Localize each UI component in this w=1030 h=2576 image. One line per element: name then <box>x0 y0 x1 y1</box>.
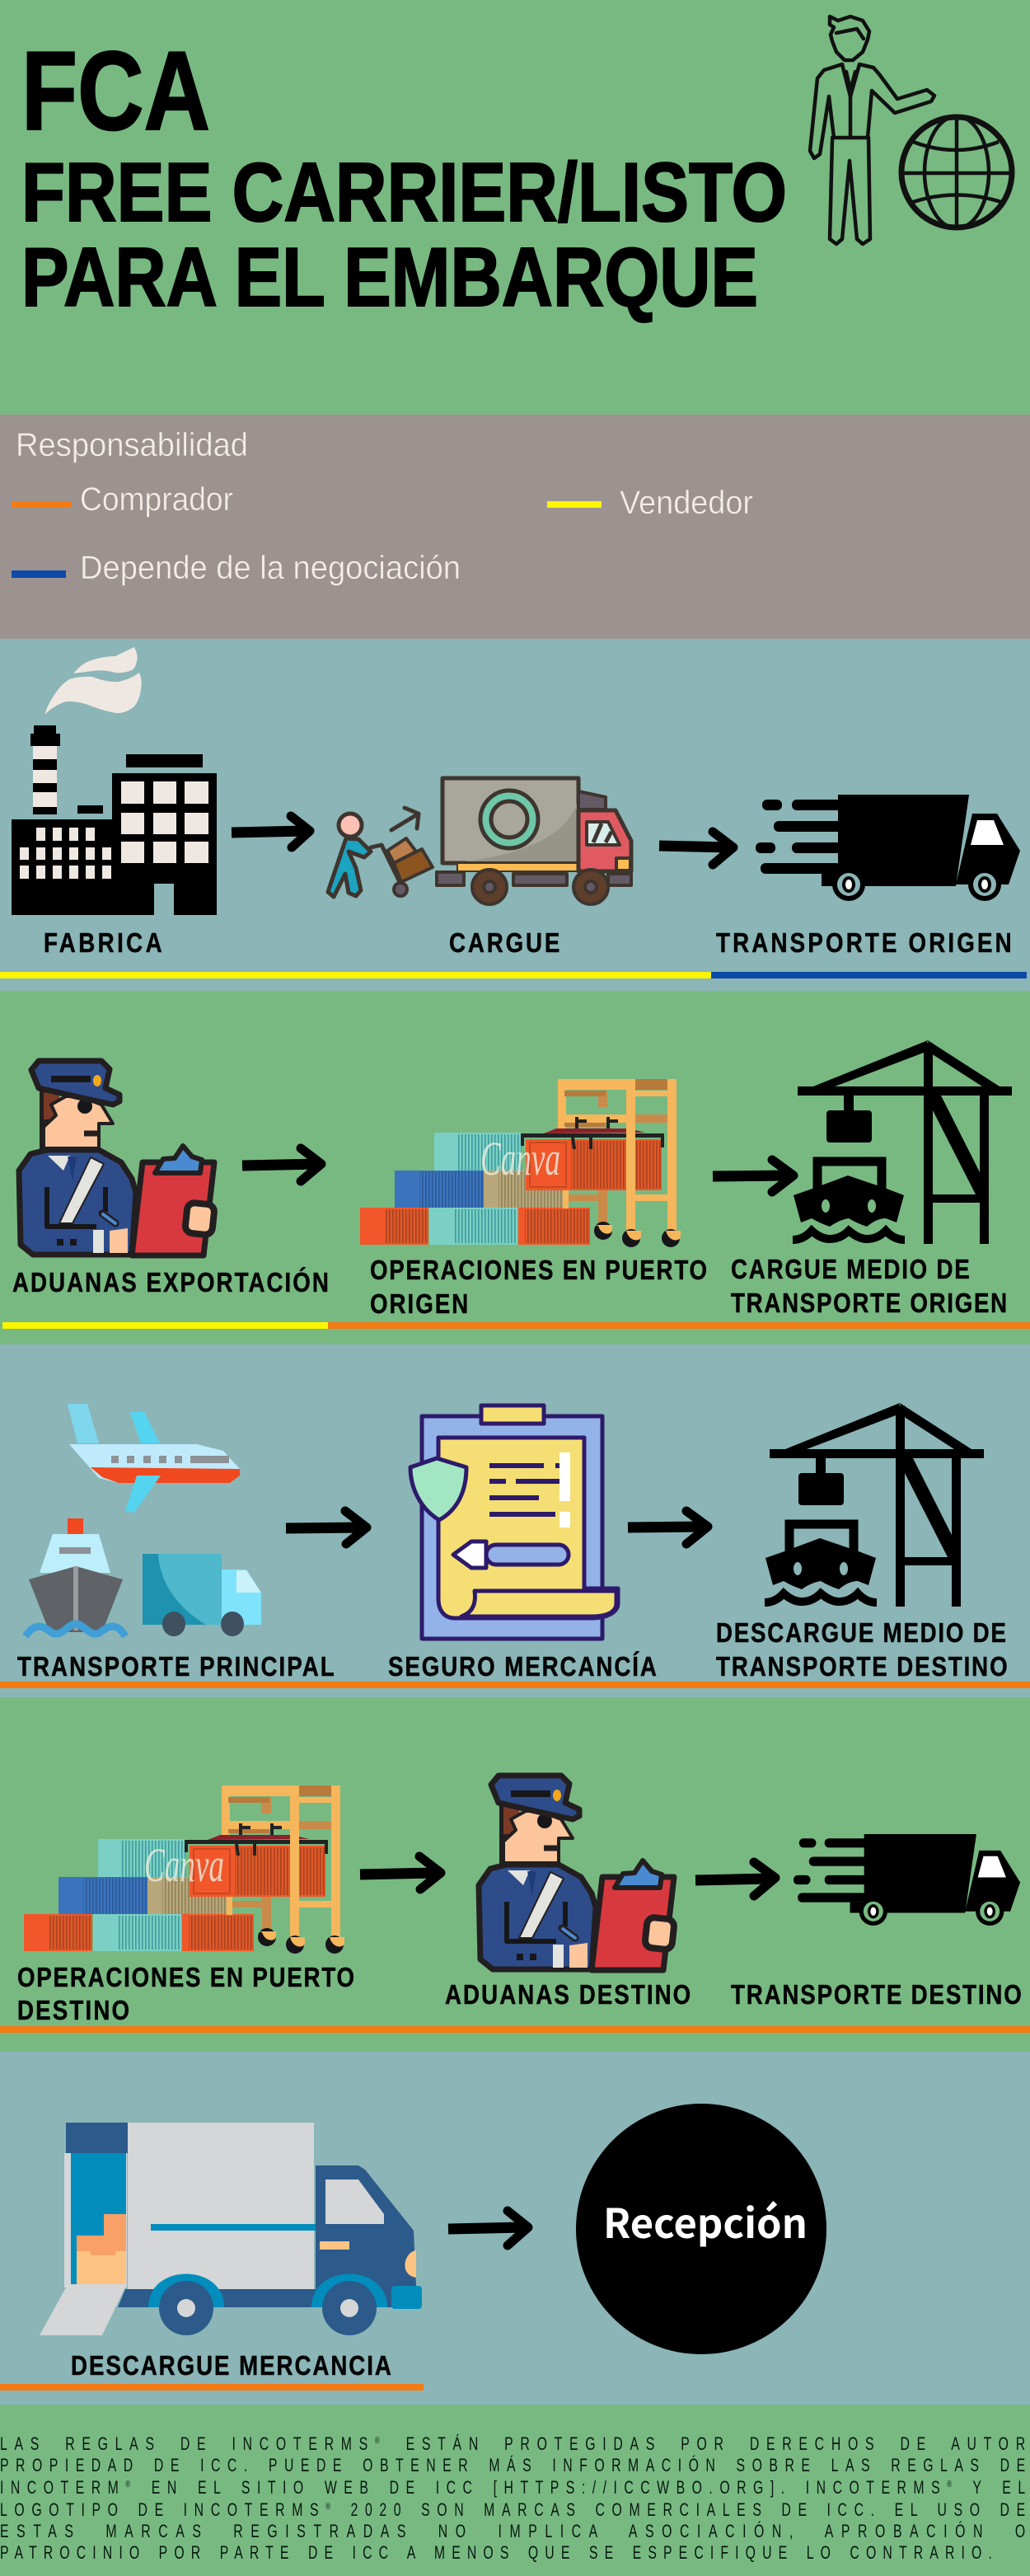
responsibility bar: buyer <box>0 2384 424 2391</box>
label: cargue medio de transporte origen <box>731 1255 1007 1319</box>
legal text block: INCOTERM <box>0 2479 119 2499</box>
panel: step row 4 <box>0 1697 1030 2052</box>
panel: delivery <box>0 2052 1030 2405</box>
label: seguro mercancia: SEGURO MERCANCÍA <box>388 1651 657 1682</box>
label: transporte origen: TRANSPORTE ORIGEN <box>716 928 1012 959</box>
icon: factory <box>12 647 217 915</box>
legal text block: ESTÁN PROTEGIDAS POR DERECHOS DE AUTOR <box>386 2435 1025 2455</box>
label: operaciones en puerto origen: ORIGEN <box>370 1289 468 1320</box>
arrow <box>360 1856 441 1889</box>
legend item: vendedor <box>547 485 753 521</box>
legal text block: ® <box>947 2480 952 2489</box>
arrow <box>713 1160 794 1192</box>
label: descargue medio de transporte destino: DESCARGUE MEDIO DE <box>716 1618 1006 1649</box>
reception circle <box>576 2104 826 2354</box>
arrow <box>232 816 310 847</box>
icon: port crane and ship <box>793 1040 1012 1244</box>
icon: ship <box>26 1518 125 1636</box>
panel: header <box>0 0 1030 415</box>
icon: speeding truck <box>794 1834 1020 1926</box>
label: cargue medio de transporte origen: TRANSPORTE ORIGEN <box>731 1288 1007 1319</box>
legal text block: ESTAS MARCAS REGISTRADAS NO IMPLICA ASOCIACIÓN, APROBACIÓN O <box>0 2521 1025 2542</box>
label: fabrica: FABRICA <box>44 928 162 959</box>
label: cargue medio de transporte origen: CARGUE MEDIO DE <box>731 1255 970 1285</box>
responsibility bar: seller then negotiable <box>0 972 1027 978</box>
legal text block: PROPIEDAD DE ICC. PUEDE OBTENER MÁS INFORMACIÓN SOBRE LAS REGLAS DE <box>0 2455 1025 2476</box>
label: descargue medio de transporte destino <box>716 1618 1008 1682</box>
responsibility bar: buyer <box>0 2026 1030 2033</box>
watermark: Canva <box>480 1132 560 1185</box>
label: cargue: CARGUE <box>449 928 559 959</box>
label: aduanas exportacion: ADUANAS EXPORTACIÓN <box>12 1266 329 1298</box>
responsibility bar: seller then buyer <box>2 1322 1030 1329</box>
legend title: Responsabilidad <box>16 427 248 463</box>
icon: speeding truck <box>756 795 1020 901</box>
label: descargue mercancia: DESCARGUE MERCANCIA <box>71 2351 391 2381</box>
title: FCA: FCA <box>21 28 210 153</box>
legal text block: ® <box>325 2502 330 2512</box>
arrow <box>659 832 733 865</box>
legal text block: PATROCINIO POR PARTE DE ICC A MENOS QUE SE ESPECIFIQUE LO CONTRARIO. <box>0 2544 992 2564</box>
icon: globe <box>901 116 1012 229</box>
legal text block: Y EL <box>958 2479 1025 2499</box>
responsibility bar: buyer <box>0 1682 1030 1688</box>
legend item: comprador <box>12 481 233 518</box>
label: operaciones en puerto destino: OPERACIONES EN PUERTO <box>17 1963 354 1993</box>
legal text block <box>0 2435 1025 2564</box>
icon: unloading truck <box>40 2123 422 2335</box>
legal text block: LAS REGLAS DE INCOTERMS <box>0 2435 368 2455</box>
legend item: vendedor: Vendedor <box>620 485 753 521</box>
icon: businessman <box>810 16 934 244</box>
arrow <box>695 1862 775 1896</box>
arrow <box>286 1511 367 1544</box>
title: free carrier line one: FREE CARRIER/LISTO <box>21 147 787 239</box>
icon: airplane <box>68 1404 240 1513</box>
label: transporte principal: TRANSPORTE PRINCIPAL <box>17 1652 335 1682</box>
arrow <box>628 1511 708 1544</box>
label: operaciones en puerto destino <box>17 1963 354 2026</box>
icon: cargo truck <box>437 778 631 904</box>
icon: insurance document <box>410 1405 618 1639</box>
legend item: depende de la negociacion: Depende de la negociación <box>80 550 461 586</box>
icon: customs officer <box>479 1776 675 1970</box>
panel: step row 1 <box>0 639 1030 991</box>
watermark: Canva <box>144 1838 224 1892</box>
label: transporte destino: TRANSPORTE DESTINO <box>731 1980 1022 2011</box>
icon: containers and crane <box>360 1079 681 1247</box>
icon: worker with dolly <box>328 808 433 897</box>
label: aduanas destino: ADUANAS DESTINO <box>445 1980 691 2011</box>
legal text block: LOGOTIPO DE INCOTERMS <box>0 2501 319 2521</box>
icon: delivery truck teal <box>143 1554 261 1636</box>
arrow <box>242 1148 321 1181</box>
panel: legal footer <box>0 2405 1030 2576</box>
label: operaciones en puerto destino: DESTINO <box>17 1996 129 2026</box>
icon: customs officer <box>19 1061 215 1255</box>
label: operaciones en puerto origen <box>370 1255 707 1320</box>
icon: containers and crane <box>24 1785 344 1954</box>
arrow <box>448 2211 528 2245</box>
legal text block: 2020 SON MARCAS COMERCIALES DE ICC. EL USO DE <box>338 2501 1025 2521</box>
legal text block: EN EL SITIO WEB DE ICC [HTTPS://ICCWBO.ORG]. INCOTERMS <box>138 2479 940 2499</box>
label: descargue medio de transporte destino: TRANSPORTE DESTINO <box>716 1652 1008 1682</box>
panel: step row 3 <box>0 1344 1030 1697</box>
label: operaciones en puerto origen: OPERACIONES EN PUERTO <box>370 1255 707 1286</box>
title: free carrier line two: PARA EL EMBARQUE <box>21 232 758 324</box>
legal text block: ® <box>375 2436 380 2446</box>
icon: port crane and ship <box>765 1403 984 1607</box>
panel: step row 2 <box>0 991 1030 1345</box>
legend item: comprador: Comprador <box>80 481 233 518</box>
panel: responsibility legend <box>0 415 1030 639</box>
reception circle: Recepción <box>603 2192 808 2250</box>
legal text block: ® <box>125 2480 130 2489</box>
